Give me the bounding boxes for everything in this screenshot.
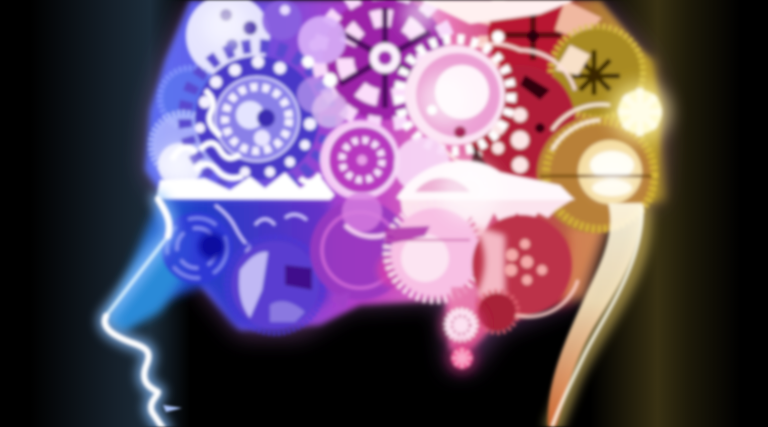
gear: eye disc xyxy=(161,212,233,284)
bright bloom highlights xyxy=(160,0,634,220)
gear: pink lower xyxy=(385,204,483,300)
head halo xyxy=(145,0,665,370)
gear: star right xyxy=(610,82,670,142)
gear: purple spoked xyxy=(227,237,323,333)
gear: red lower xyxy=(472,215,578,317)
head colour mass xyxy=(108,0,665,350)
gear: yellow xyxy=(551,26,643,118)
gear: pink tiny xyxy=(446,342,478,374)
gear: gold xyxy=(537,104,654,233)
face profile line xyxy=(105,199,182,427)
white divider wave band xyxy=(156,90,335,200)
gear: top right peach xyxy=(420,0,602,40)
squiggles xyxy=(215,205,307,261)
gear: red top xyxy=(483,0,583,85)
hair and neck glow line xyxy=(548,203,643,427)
gear: pale mauve edges xyxy=(312,92,450,193)
background glow: right xyxy=(590,0,740,427)
gear: lilac strip xyxy=(297,16,346,113)
gear: magenta main xyxy=(319,0,451,124)
background glow: left xyxy=(30,0,190,427)
lower gears xyxy=(161,192,578,374)
upper gears xyxy=(151,0,670,233)
gear: blue ring xyxy=(185,46,329,190)
big pale gear with large teeth xyxy=(396,160,575,236)
gear: magenta small ring xyxy=(320,120,400,200)
gear: small red bottom xyxy=(476,291,518,333)
gear: red centre xyxy=(429,44,575,175)
gear: pink ring xyxy=(399,39,511,151)
gear: top-left blue xyxy=(186,0,321,78)
gear: violet large xyxy=(310,192,413,310)
gear: white small xyxy=(440,287,484,347)
gear: far-left teeth xyxy=(151,68,220,187)
